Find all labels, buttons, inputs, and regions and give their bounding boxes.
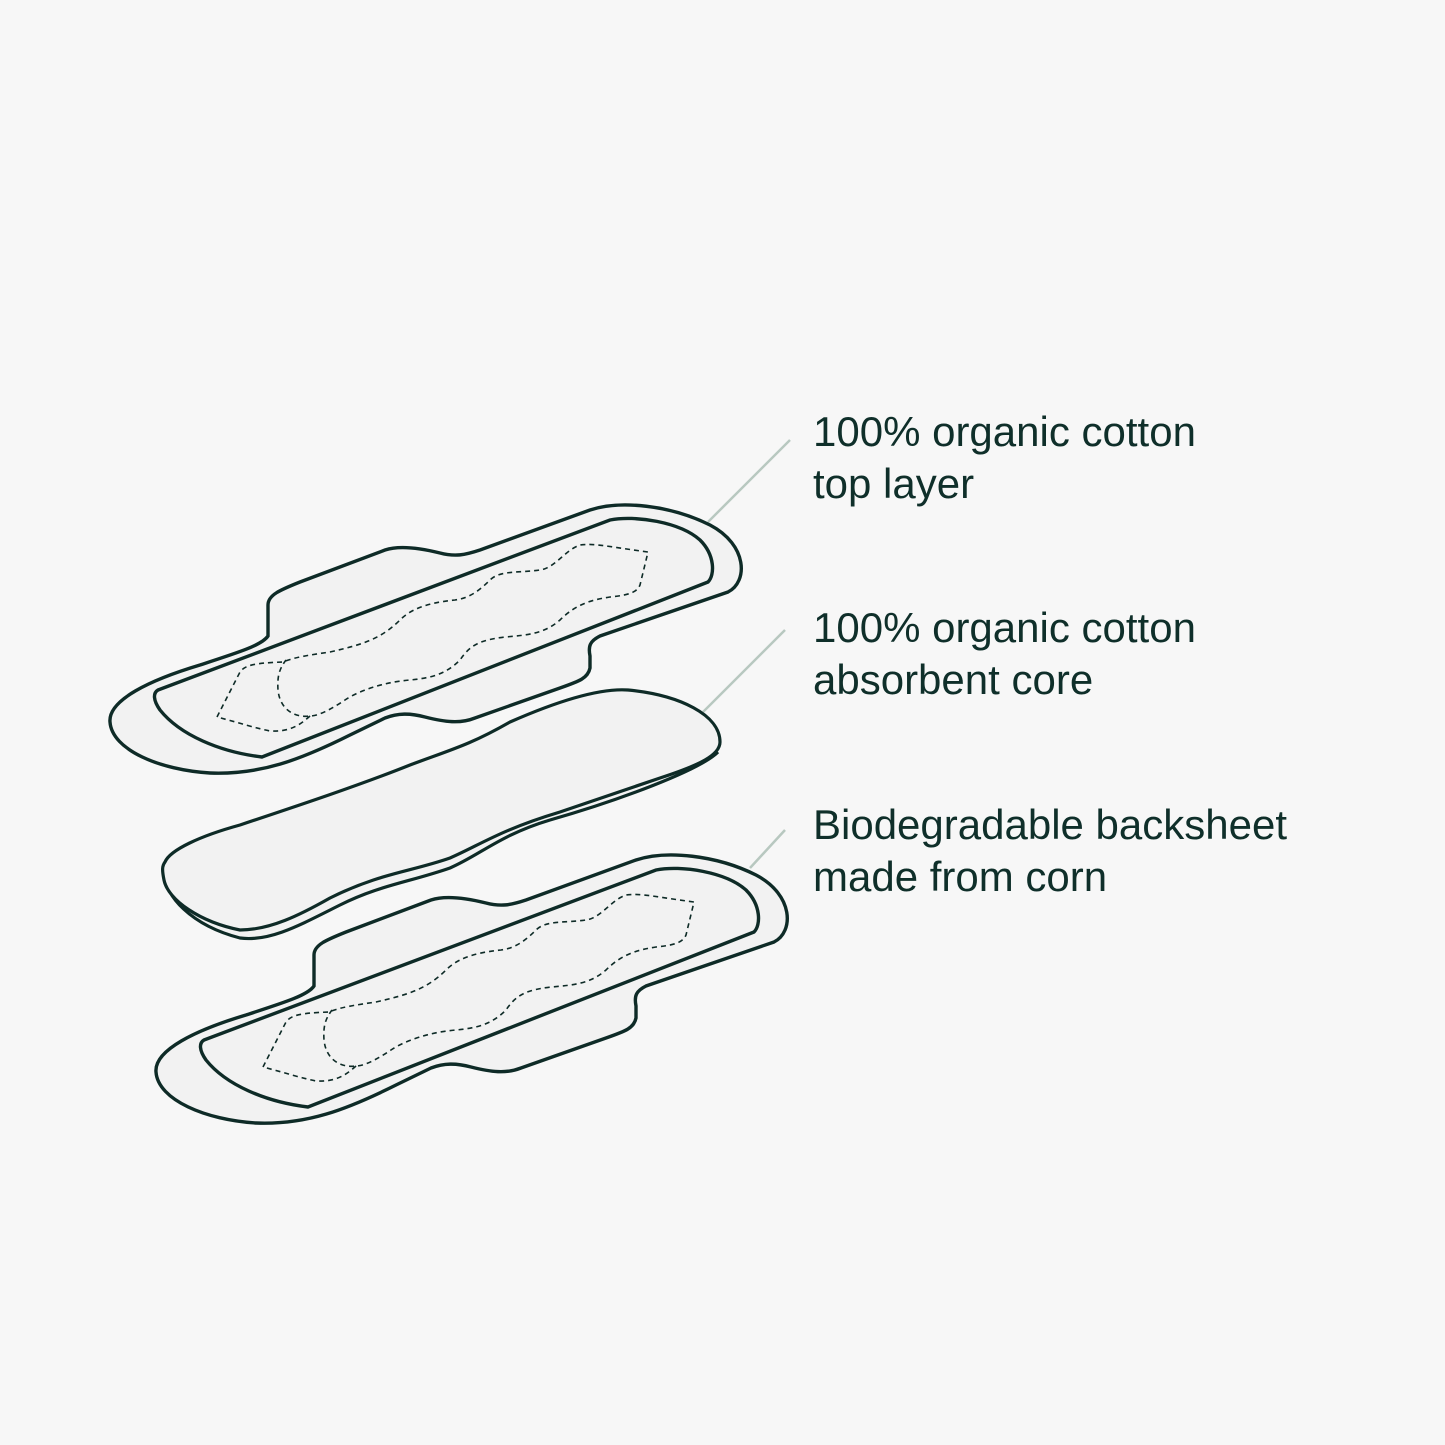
label: backsheet	[813, 801, 1287, 900]
label: top layer	[813, 408, 1196, 507]
label: backsheet: made from corn	[813, 853, 1107, 900]
label: top layer: top layer	[813, 460, 974, 507]
label: absorbent core: absorbent core	[813, 656, 1093, 703]
label: top layer: 100% organic cotton	[813, 408, 1196, 455]
label: backsheet: Biodegradable backsheet	[813, 801, 1287, 848]
illustration: bottom backsheet pad	[156, 855, 787, 1123]
illustration: top layer pad	[110, 505, 741, 773]
label: absorbent core: 100% organic cotton	[813, 604, 1196, 651]
leader lines	[703, 440, 790, 868]
illustration: absorbent core	[163, 690, 720, 939]
label: absorbent core	[813, 604, 1196, 703]
